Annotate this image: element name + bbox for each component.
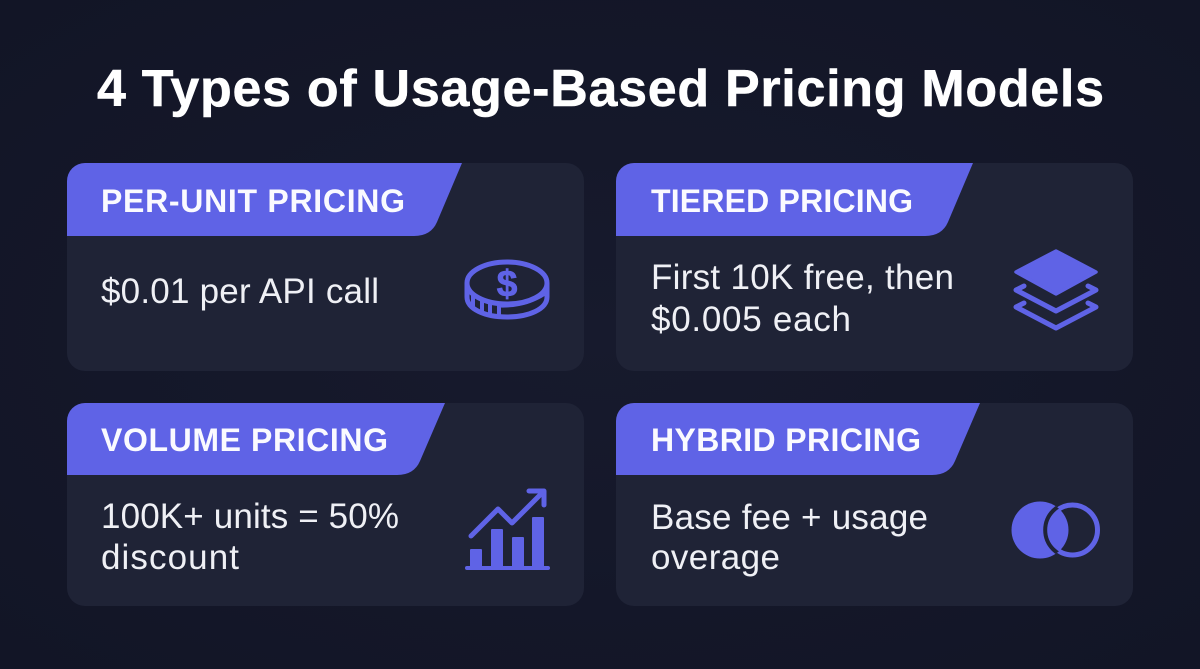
text: volume example: discount (101, 538, 239, 577)
icon: growth chart (465, 491, 550, 570)
text: volume example: 100K+ units = 50% (101, 497, 399, 536)
icon: overlapping circles (1012, 502, 1100, 558)
banner: tiered pricing (616, 163, 973, 236)
banner: volume pricing (67, 403, 445, 475)
text: per-unit example: $0.01 per API call (101, 272, 379, 311)
text: hybrid example: Base fee + usage (651, 498, 928, 537)
text: hybrid example: overage (651, 538, 780, 577)
heading: tiered pricing: TIERED PRICING (651, 183, 913, 219)
banner: per-unit pricing (67, 163, 462, 236)
panel: per-unit pricing (67, 163, 584, 371)
banner: hybrid pricing (616, 403, 980, 475)
heading: hybrid pricing: HYBRID PRICING (651, 422, 921, 458)
text: tiered example: $0.005 each (651, 300, 851, 339)
title: 4 Types of Usage-Based Pricing Models (97, 60, 1104, 118)
text: volume example (101, 497, 399, 577)
text: tiered example: First 10K free, then (651, 258, 954, 297)
heading: volume pricing: VOLUME PRICING (101, 422, 388, 458)
panel: tiered pricing (616, 163, 1133, 371)
text: hybrid example (651, 498, 928, 577)
panel: volume pricing (67, 403, 584, 606)
icon: layers (1016, 251, 1096, 328)
text: tiered example (651, 258, 954, 339)
icon: coin (467, 262, 547, 317)
heading: per-unit pricing: PER-UNIT PRICING (101, 183, 405, 219)
panel: hybrid pricing (616, 403, 1133, 606)
icon: coin: $ (497, 263, 518, 304)
